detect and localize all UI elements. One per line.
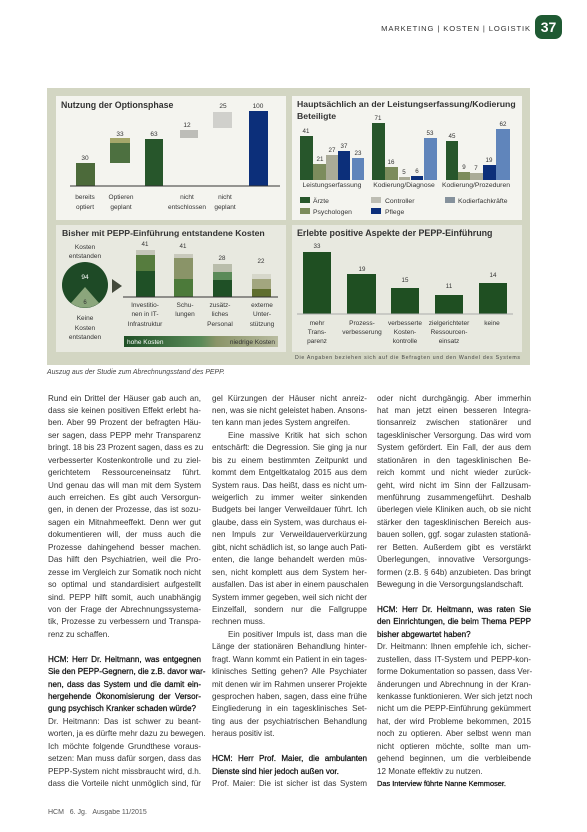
text column 1: dass die Vorteile nicht unmöglich sind, für [48,779,201,788]
text column 3: stationären in den tagesklinischen Be- [377,456,531,465]
grouped bar chart: 21 [317,156,324,163]
text column 2: Budgets bei langer Verweildauer führt. Ich [212,505,367,514]
bar chart: positive Aspekte: keine [484,320,500,327]
bar chart: positive Aspekte: Kosten- [394,329,416,336]
page number badge [535,15,562,39]
text column 2: Länge der stationären Behandlung hinter- [212,642,367,651]
text column 2: klinisches Setting gehen? Alle Psychiater [212,667,367,676]
grouped bar chart: 5 [402,169,406,176]
waterfall chart: optiert [76,204,94,211]
bar chart: positive Aspekte: 11 [446,283,453,290]
text column 2: rechnen muss. [212,617,265,626]
text column 1: Sie den PEPP-Gegnern, die z.B. davor war- [48,667,205,676]
grouped bar chart: 9 [462,164,466,171]
grouped bar chart: 71 [375,115,382,122]
text column 2: Dienste sind hier jedoch außen vor. [212,767,339,776]
text column 3: tionsanreiz zwischen stationärer und [377,418,531,427]
text column 3: formen (z.B. § 64b) anzubieten. Das bringt [377,568,531,577]
grouped bar chart: 53 [427,130,434,137]
stacked bar chart: Kosten [123,241,278,328]
grouped bar chart: Leistungserfassung [303,182,362,189]
waterfall chart: 33 [116,131,124,138]
text column 1: so optimal und standardisiert aufgestellt [48,580,201,589]
text column 2: gibt, nicht schädlich ist, so lange auch Pati- [212,543,367,552]
text column 2: bis zu einem bestimmten Zeitpunkt und [212,456,367,465]
bar chart: positive Aspekte: verbesserte [388,320,422,327]
text column 2: Eine massive Kritik hat sich schon [228,431,367,440]
pie chart: Kosten entstanden: entstanden [69,334,101,341]
legend: Ärzte [313,197,329,205]
text column 2: mit denen wir im Rahmen unserer Projekte [212,680,367,689]
waterfall chart: 12 [183,122,191,129]
pie chart: Kosten entstanden: Kosten [75,325,95,332]
legend [300,197,508,216]
grouped bar chart: Kodierung/Diagnose [373,182,435,189]
text column 1: gerichtetem Ressourceneinsatz führt. [48,468,201,477]
text column 3: überlegen viele Kliniken auch, ob sie nicht [377,505,531,514]
stacked bar chart: Kosten: 41 [180,243,187,250]
source note: Die Angaben beziehen sich auf die Befragten und den Wandel des Systems [295,355,520,361]
pie chart: Kosten entstanden: 94 [81,274,89,281]
text column 1: auch erreichen. Es gibt auch Versorgun- [48,493,201,502]
grouped bar chart: Kodierung/Prozeduren [442,182,510,189]
text column 1: dass sie keinen positiven Effekt erlebt ha- [48,406,201,415]
text column 3: hat, der wird Probleme bekommen, 2015 [377,717,531,726]
waterfall chart: bereits [75,194,96,201]
stacked bar chart: Kosten: nen in IT- [131,311,159,318]
waterfall chart: 30 [81,155,89,162]
panel: Hauptsächlich an der Leistungserfassung/Kodierung Beteiligte [292,96,522,220]
pie chart: Kosten entstanden: Keine [77,315,94,322]
text column 1: worten, ja es dürfte mehr dazu zu bewegen. [48,729,205,738]
text column 2: HCM: Herr Prof. Maier, die ambulanten [212,754,367,763]
text column 2: fragt. Wann kommt ein Patient in ein tages- [212,655,367,664]
text column 3: änderungen und Abrechnung in der Kran- [377,680,531,689]
bar chart: positive Aspekte: verbesserung [342,329,382,336]
grouped bar chart: 41 [303,128,310,135]
text column 1: sind. PEPP hilft somit, auch unabhängig [48,592,201,602]
text column 1: Dr. Heitmann: Das ist schwer zu beant- [48,717,201,726]
bar chart: positive Aspekte: einsatz [439,338,459,345]
stacked bar chart: Kosten: 41 [142,241,149,248]
grouped bar chart: 6 [415,168,419,175]
stacked bar chart: Kosten: stützung [250,321,275,328]
text column 3: Bewegung in die Versorgungslandschaft. [377,580,524,589]
stacked bar chart: Kosten: 22 [258,258,265,265]
text column 1: von der Frage der Abrechnungssystema- [48,605,201,614]
cost gradient legend [124,336,278,347]
text column 3: gehend beginnen, um die verbleibende [377,754,531,763]
text column 3: 12 Monate effektiv zu nutzen. [377,767,483,776]
text column 1: gen, in denen der Prozesse, das ist sozu- [48,505,201,514]
pie chart: Kosten entstanden [62,244,108,341]
text column 1: ser sagen, dass PEPP mehr Transparenz [48,431,201,440]
heading: Nutzung der Optionsphase: Nutzung der Optionsphase [61,100,174,110]
text column 1: zesse im Vergleich zur Somatik noch nicht [48,568,201,577]
text column 3 [377,394,533,788]
legend: Psychologen [313,209,352,216]
heading: positive Aspekte: Erlebte positive Aspekte der PEPP-Einführung [297,228,492,238]
waterfall chart: entschlossen [168,204,206,211]
text column 1 [48,394,206,788]
bar chart: positive Aspekte: Trans- [308,329,326,336]
text column 3: geht, wird nicht im Sinn der Fallzusam- [377,481,531,490]
pie chart: Kosten entstanden: 6 [83,300,87,306]
waterfall chart: 63 [150,131,158,138]
text column 2: ausfallen. Das ist aber in einem pauschalen [212,580,369,589]
text column 1: dokumentieren will, der muss auch die [48,530,201,539]
stacked bar chart: Kosten: Unter- [253,311,271,318]
text column 1: Prozesse dahingehend besser machen. [48,543,201,552]
legend: Kodierfachkräfte [458,198,508,205]
text column 2: ting aus der psychiatrischen Behandlung [212,717,367,726]
text column 1: gung psychisch Kranker schaden würde? [48,704,196,713]
grouped bar chart: 16 [388,159,395,166]
text column 1: hergehende Ökonomisierung der Versor- [48,692,201,701]
pie chart: Kosten entstanden: entstanden [69,253,101,260]
grouped bar chart: 7 [474,165,478,172]
bar chart: positive Aspekte: 33 [314,243,321,250]
bar chart: positive Aspekte [297,243,513,345]
bar chart: positive Aspekte: 19 [359,266,366,273]
text column 3: nicht um die PEPP-Einführung gekümmert [377,704,531,713]
stacked bar chart: Kosten: Investitio- [131,302,159,309]
text column 3: den Einrichtungen, die beim Thema PEPP [377,617,531,626]
text column 2: heraus positiv ist. [212,729,275,738]
stacked bar chart: Kosten: Personal [207,321,233,328]
grouped bar chart: 45 [449,133,456,140]
waterfall chart: 100 [253,103,264,110]
waterfall chart: 25 [219,103,227,110]
cost gradient legend: niedrige Kosten [230,339,275,346]
bar chart: positive Aspekte: kontrolle [393,338,418,345]
text column 1: sagen ein Mitnahmeeffekt. Denn wer gut [48,518,201,527]
heading: Hauptsächlich beteiligte: Hauptsächlich an der Leistungserfassung/Kodierung [297,99,516,109]
legend: Pflege [385,209,404,216]
text column 1: Ich möchte folgende Grundthese voraus- [48,742,201,751]
bar chart: positive Aspekte: Prozess- [349,320,375,327]
text column 2: Ein positiver Impuls ist, dass man die [228,630,367,639]
text column 3: rer Betten. Außerdem gibt es verstärkt [377,543,531,552]
stacked bar chart: Kosten: externe [251,302,273,309]
text column 1: HCM: Herr Dr. Heitmann, was entgegnen [48,655,201,664]
bar chart: positive Aspekte: Ressourcen- [431,329,467,336]
text column 3: bisher abgewartet haben? [377,630,471,639]
text column 3: menführung zusammengeführt. Deshalb [377,493,531,502]
waterfall chart: geplant [214,204,236,211]
running header: MARKETING | KOSTEN | LOGISTIK [381,24,531,33]
text column 3: tagesklinischer Versorgung. Das wird vom [377,431,531,440]
text column 1: Das hilft den Psychiatrien, weil die Pro- [48,555,201,564]
text column 2: ten kann man jedes System angreifen. [212,418,350,427]
text column 2: kommt dem Entgeltkatalog 2015 aus dem [212,468,367,477]
text column 3: stärker den tagesklinischen Bereich aus- [377,518,531,527]
text column 1: tik, Prozesse zu verbessern und Transpa- [48,617,201,626]
text column 2: entschärft: die Degression. Sie ging ja nur [212,443,367,452]
text column 1: verbesserter Kostenkontrolle und zu ziel- [48,456,201,465]
stacked bar chart: Kosten: Schu- [177,302,193,309]
bar chart: positive Aspekte: 15 [402,277,409,284]
text column 2: System raus. Das heißt, dass es nicht um- [212,481,367,490]
bar chart: positive Aspekte: parenz [307,338,327,345]
grouped bar chart: 62 [500,121,507,128]
bar chart: positive Aspekte: 14 [490,272,497,279]
text column 3: HCM: Herr Dr. Heitmann, was raten Sie [377,605,531,614]
waterfall chart: Optieren [109,194,134,201]
waterfall chart [70,103,280,211]
panel: Hauptsächlich an der Leistungserfassung/Kodierung Beteiligte: Beteiligte [297,111,336,121]
bar chart: positive Aspekte: zielgerichteter [429,320,470,327]
panel: Bisher mit PEPP-Einführung entstandene Kosten [56,225,286,352]
text column 2: nen, was sie nicht geleistet haben. Ansons- [212,406,367,415]
text column 3: nicht optieren möchte, sollte man um- [377,742,531,751]
panel: Erlebte positive Aspekte der PEPP-Einführung [292,225,522,352]
infographic charts [46,88,530,376]
text column 3: zustellen, dass IT-System und PEPP-kon- [377,655,531,664]
text column 1: nen, dass das System und die damit ein- [48,680,201,689]
text column 2: gel Kürzungen der Häuser nicht anreiz- [212,394,367,402]
footer: HCM 6. Jg. Ausgabe 11/2015 [48,809,147,816]
text column 1: Rund ein Drittel der Häuser gab auch an, [48,394,201,402]
bar chart: positive Aspekte: mehr [310,320,325,327]
heading: entstandene Kosten: Bisher mit PEPP-Einführung entstandene Kosten [62,228,265,238]
legend: Controller [385,198,415,205]
text column 2: Eingliederung in ein tagesklinisches Set- [212,704,367,713]
stacked bar chart: Kosten: 28 [219,255,226,262]
stacked bar chart: Kosten: Infrastruktur [128,321,163,328]
text column 3: kenkasse funktionieren. Wer sich jetzt noch [377,692,533,701]
caption: Auszug aus der Studie zum Abrechnungsstand des PEPP. [46,369,225,376]
text column 1: renz zu schaffen. [48,630,110,639]
grouped bar chart: 23 [355,150,362,157]
text column 2: Einzelfall, sondern nur die Fallgruppe [212,605,367,614]
text column 2 [212,394,369,788]
text column 3: Das Interview führte Nanne Kemmoser. [377,779,506,788]
grouped bar chart [300,115,510,189]
text column 3: Überlegungen, innovative Versorgungs- [377,555,531,564]
text column 1: bringt. 18 bis 23 Prozent sagen, dass es zu [48,443,203,452]
stacked bar chart: Kosten: zusätz- [210,302,230,309]
text column 1: PEPP-System nicht missbraucht wird, d.h. [48,767,201,776]
stacked bar chart: Kosten: lungen [175,311,195,318]
stacked bar chart: Kosten: liches [212,311,229,318]
text column 2: System immer gegeben, weil sich nicht der [212,592,367,602]
text column 3: oder nicht durchgängig. Aber immerhin [377,394,531,402]
pie chart: Kosten entstanden: Kosten [75,244,95,251]
page number badge: 37 [541,19,556,35]
text column 2: Prof. Maier: Die ist sicher ist das System [212,779,367,788]
grouped bar chart: 19 [486,157,493,164]
text column 1: Und genau das will man mit dem System [48,481,201,490]
text column 3: noch zu optieren. Aber selbst wenn man [377,729,531,738]
text column 3: bauen sollen, ggf. sogar zulasten stationä- [377,530,531,539]
text column 2: glaube, dass ein System, was durchaus ei- [212,518,367,527]
text column 2: sen, nicht komplett aus dem System her- [212,568,367,577]
text column 3: reich kommt und nicht wieder zurück- [377,468,531,477]
grouped bar chart: 37 [341,143,348,150]
text column 3: forme Dokumentation so passen, dass Ver- [377,667,532,676]
cost gradient legend: hohe Kosten [127,339,164,346]
text column 2: gesprochen haben, sagen, dass eine frühe [212,692,367,701]
text column 1: setzen: Man muss dafür sorgen, dass das [48,754,201,763]
text column 3: System gefördert. Ein Fall, der aus dem [377,443,531,452]
grouped bar chart: 27 [329,147,336,154]
waterfall chart: geplant [110,204,132,211]
text column 2: nen Impuls zur Verweildauerverkürzung [212,530,367,539]
waterfall chart: nicht [180,194,194,201]
panel: Nutzung der Optionsphase [56,96,286,220]
text column 3: hat man jetzt einen besseren Integra- [377,406,531,415]
text column 2: enten, die lange behandelt werden müs- [212,555,367,564]
waterfall chart: nicht [218,194,232,201]
text column 1: ben. Aber 99 Prozent der befragten Häu- [48,418,201,427]
text column 3: Dr. Heitmann: Ihnen empfehle ich, sicher- [377,642,531,651]
arrow [112,279,122,293]
text column 2: weigerlich zu immer weiter sinkenden [212,493,367,502]
